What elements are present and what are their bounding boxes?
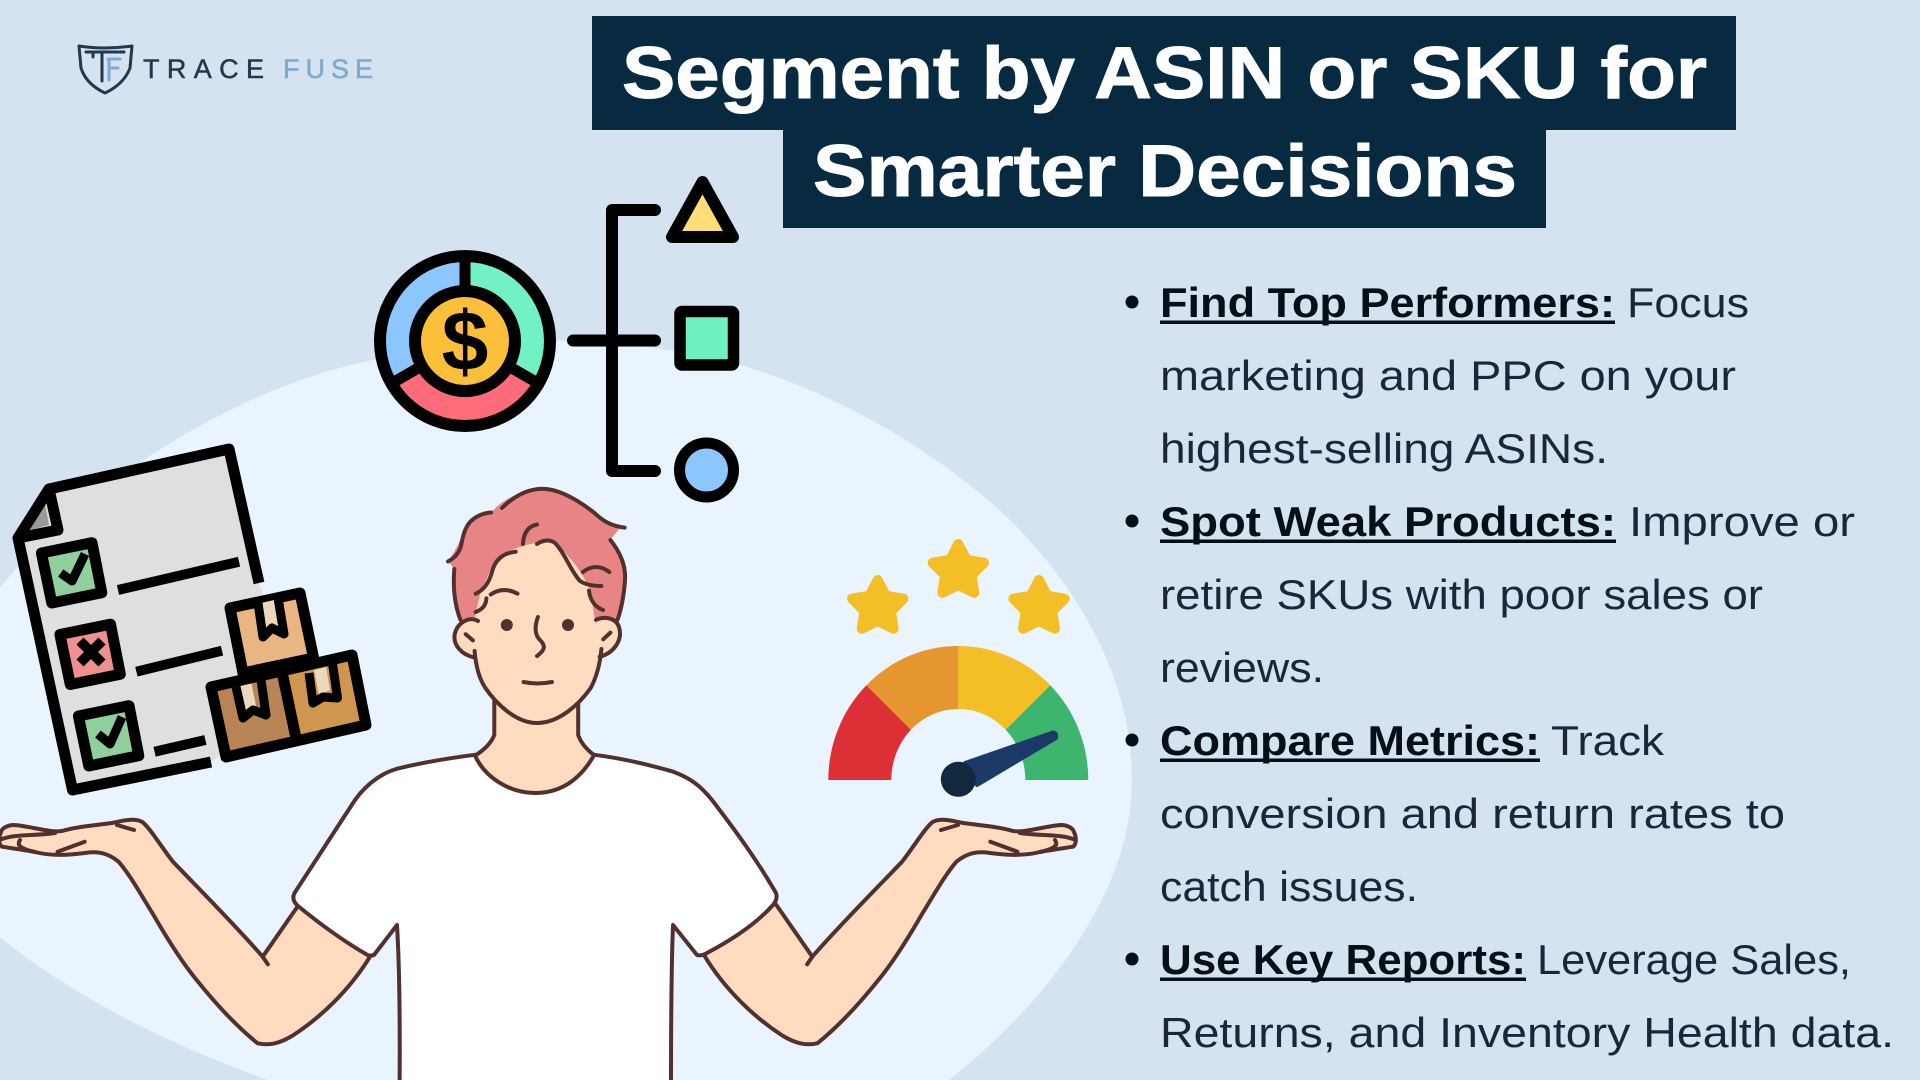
- item: find top performers: Focus: [1627, 279, 1749, 326]
- icon: shield: [79, 46, 132, 93]
- item: compare metrics: Compare Metrics:: [1160, 717, 1540, 764]
- item: find top performers: marketing and PPC on your: [1160, 352, 1736, 399]
- donut chart with dollar: $: [442, 294, 488, 388]
- square node: [680, 312, 734, 365]
- person shrugging: [0, 489, 1076, 1080]
- item: compare metrics: catch issues.: [1160, 863, 1418, 910]
- item: find top performers: highest-selling ASINs.: [1160, 425, 1608, 472]
- checkbox: pass: [41, 543, 102, 603]
- item: use key reports: Leverage Sales,: [1537, 936, 1851, 983]
- donut chart with dollar: [380, 256, 550, 426]
- left arm: [0, 820, 371, 1044]
- gauge arcs: [828, 646, 1088, 780]
- checklist line 2: [136, 651, 222, 672]
- t-shirt: [293, 755, 777, 1080]
- eyes: [501, 619, 574, 631]
- hair: [448, 489, 625, 625]
- tree connector: [573, 210, 655, 471]
- face and hair lines: [475, 649, 601, 723]
- title text line 2: Smarter Decisions: [813, 131, 1517, 212]
- title: [592, 16, 1736, 228]
- cardboard box top: [230, 593, 314, 673]
- item: spot weak products: [1126, 498, 1855, 691]
- checkbox: fail: [60, 624, 120, 684]
- title text line 1: Segment by ASIN or SKU for: [622, 33, 1707, 114]
- item: compare metrics: Track: [1551, 717, 1665, 764]
- checklist line 3: [155, 740, 205, 752]
- mouth: [524, 682, 552, 684]
- background light blob: [0, 341, 1132, 1080]
- rating gauge with stars: [828, 544, 1088, 797]
- item: compare metrics: conversion and return rates to: [1160, 790, 1785, 837]
- icon: segmentation tree with donut: [380, 182, 734, 497]
- item: use key reports: Use Key Reports:: [1160, 936, 1526, 983]
- title banner line 2: [783, 130, 1546, 228]
- item: find top performers: [1126, 279, 1749, 472]
- gauge hub: [941, 762, 976, 797]
- gauge needle: [965, 732, 1056, 785]
- circle node: [680, 443, 734, 497]
- left eyebrow: [491, 590, 518, 594]
- hair outline: [448, 489, 625, 620]
- item: use key reports: Returns, and Inventory Health data.: [1160, 1009, 1894, 1056]
- right arm: [704, 820, 1076, 1044]
- checklist line 1: [118, 562, 239, 590]
- left ear: [454, 619, 478, 658]
- document: [18, 449, 300, 790]
- item: use key reports: [1126, 936, 1894, 1056]
- logo wordmark light: FUSE: [283, 54, 373, 84]
- stars: [852, 544, 1065, 629]
- item: compare metrics: [1126, 717, 1785, 910]
- item: find top performers: Find Top Performers:: [1160, 279, 1615, 326]
- neck outline: [476, 699, 594, 755]
- ear inner lines: [466, 633, 610, 640]
- item: spot weak products: retire SKUs with poor sales or: [1160, 571, 1763, 618]
- triangle node: [672, 182, 733, 237]
- right hand details: [807, 825, 1073, 964]
- checkbox: pass: [78, 706, 139, 766]
- item: spot weak products: reviews.: [1160, 644, 1324, 691]
- icon: checklist and boxes: [18, 449, 366, 790]
- logo wordmark dark: TRACE: [143, 54, 264, 84]
- left hand details: [2, 825, 268, 964]
- neck: [474, 695, 594, 793]
- title banner line 1: [592, 16, 1736, 130]
- logo: Trace Fuse: [79, 46, 373, 93]
- item: spot weak products: Spot Weak Products:: [1160, 498, 1616, 545]
- item: spot weak products: Improve or: [1629, 498, 1855, 545]
- hair strands: [476, 524, 609, 612]
- right ear: [596, 618, 620, 657]
- bullet list: [1126, 279, 1894, 1056]
- face: [475, 541, 601, 723]
- nose: [536, 617, 544, 656]
- cardboard boxes bottom: [211, 655, 366, 757]
